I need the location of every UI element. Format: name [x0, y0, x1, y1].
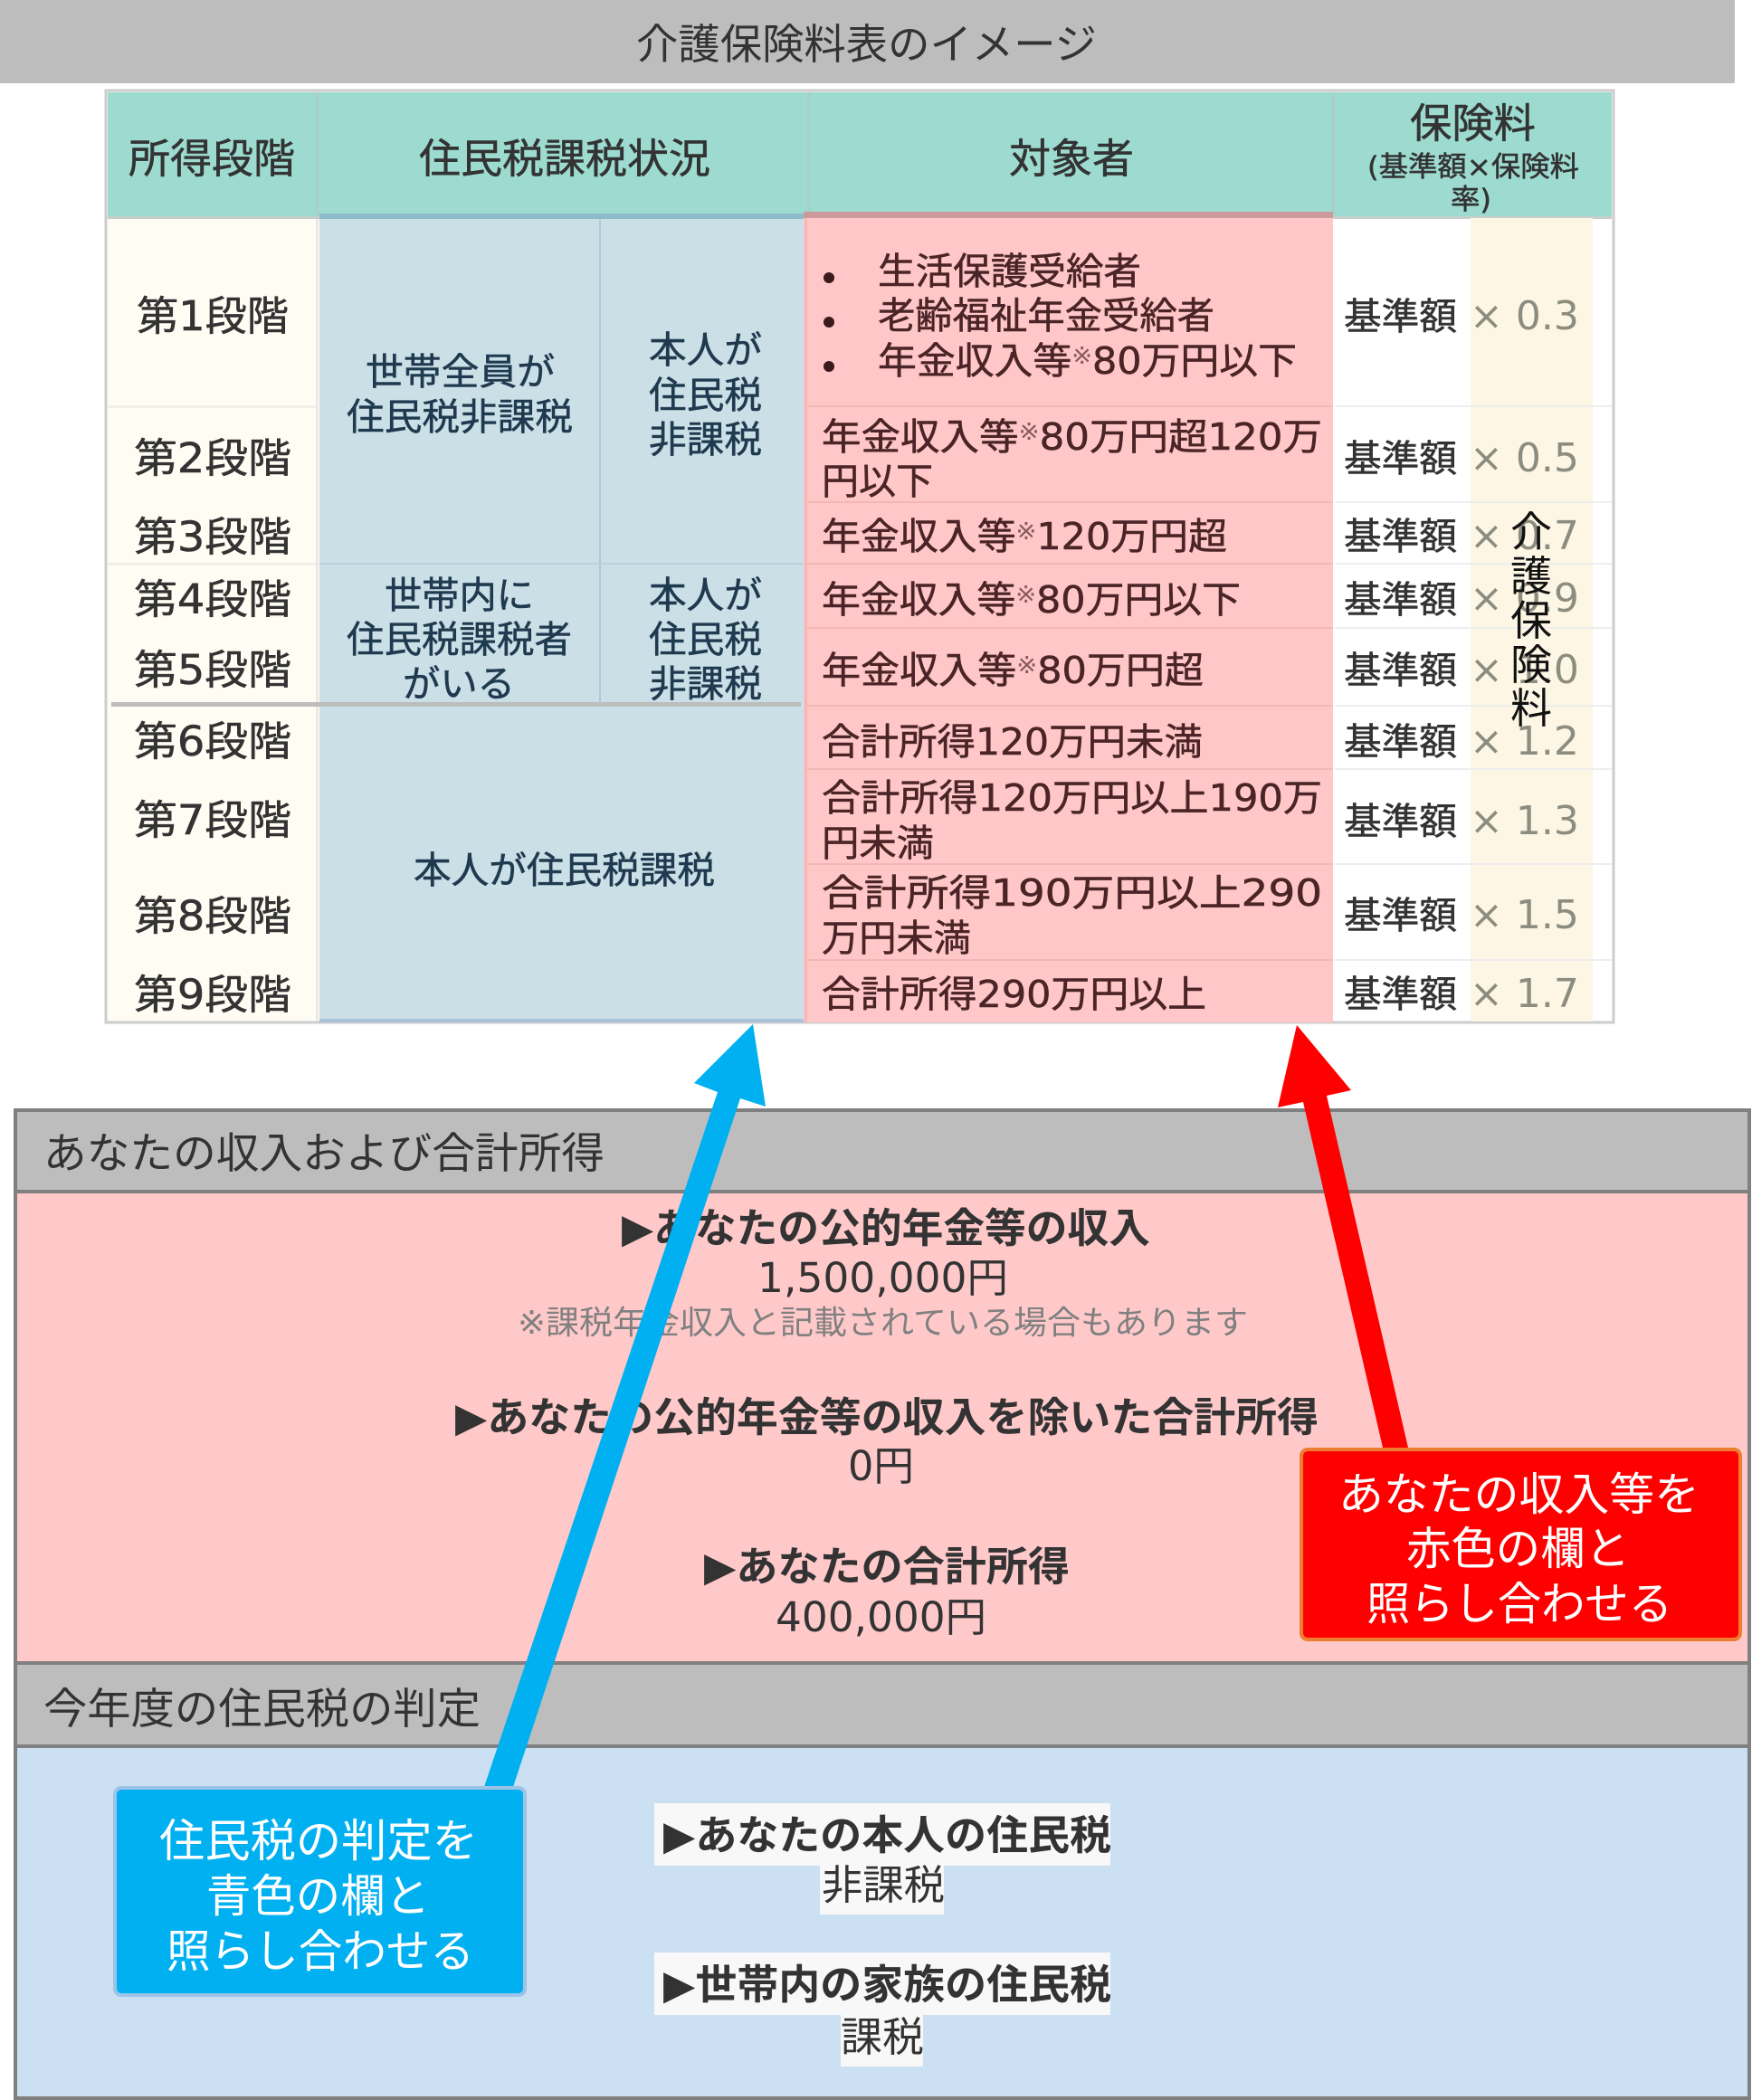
premium formula column: × 1.7 [1470, 971, 1579, 1017]
premium formula column: × 1.2 [1470, 718, 1579, 765]
premium formula column: 基準額 [1344, 720, 1457, 764]
income stage column: 第8段階 [134, 892, 291, 940]
income panel body: 1,500,000円 [757, 1254, 1008, 1302]
red target column: 年金収入等 [822, 415, 1007, 459]
income panel body: ▶あなたの公的年金等の収入 [622, 1204, 1150, 1252]
red target column: 120万円超 [1036, 515, 1227, 558]
premium formula column: × 0.5 [1470, 435, 1579, 481]
callout: compare income with red column [1301, 1449, 1740, 1639]
tax panel body [15, 1746, 1749, 2098]
panel: income and total earnings [15, 1110, 1749, 1663]
red target column: 合計所得120万円以上190万 [822, 776, 1322, 820]
vertical label: premium [1510, 508, 1552, 733]
panel: resident tax judgment [15, 1663, 1749, 2098]
arrow: blue pointing to tax status column [484, 1024, 766, 1787]
red target column: 年金収入等 [822, 515, 1007, 558]
title bar [0, 0, 1735, 83]
tax panel body: 非課税 [822, 1861, 945, 1909]
premium formula column: 基準額 [1344, 649, 1457, 692]
red target column: ※ [1015, 582, 1036, 609]
callout: compare income with red column: 照らし合わせる [1366, 1578, 1672, 1630]
premium formula column: 基準額 [1344, 515, 1457, 558]
income panel body: 400,000円 [776, 1593, 986, 1641]
red target column: 万円未満 [822, 917, 971, 960]
callout: compare tax judgment with blue column: 青色の欄と [206, 1870, 430, 1923]
premium formula column: × 1.0 [1470, 647, 1579, 693]
blue tax status column: 世帯内に [385, 574, 534, 617]
premium formula column: × 1.5 [1470, 892, 1579, 938]
blue tax status column: 住民税 [649, 618, 762, 661]
callout: compare tax judgment with blue column: 照らし合わせる [167, 1925, 474, 1978]
red target column: ※ [1016, 652, 1037, 679]
income stage column: 第2段階 [134, 434, 291, 482]
red target column: ※ [1016, 518, 1036, 546]
red target column: 合計所得190万円以上290 [822, 871, 1322, 915]
blue tax status column: 住民税課税者 [347, 618, 572, 661]
income stage column: 第1段階 [137, 292, 289, 340]
premium formula column: 基準額 [1344, 295, 1457, 338]
income stage column: 第5段階 [134, 646, 291, 694]
red target column: 老齢福祉年金受給者 [878, 294, 1214, 337]
callout: compare tax judgment with blue column [115, 1788, 525, 1995]
income panel body: ▶あなたの合計所得 [704, 1543, 1070, 1591]
income stage column: 第6段階 [134, 717, 291, 765]
blue tax status column [111, 214, 804, 1022]
vertical label: premium: 料 [1510, 684, 1552, 733]
premium formula column: 基準額 [1344, 800, 1457, 843]
red target column: 80万円以下 [1092, 339, 1297, 383]
red target column: 年金収入等 [822, 649, 1007, 692]
red target column: 合計所得120万円未満 [822, 720, 1203, 764]
red target column: 合計所得290万円以上 [822, 973, 1206, 1016]
vertical label: premium: 保 [1510, 596, 1552, 645]
red target column: 年金収入等 [822, 578, 1007, 622]
callout: compare income with red column: あなたの収入等を [1338, 1468, 1700, 1521]
red target column: 80万円以下 [1036, 578, 1241, 622]
premium formula column: × 0.7 [1470, 513, 1579, 559]
table header row: 対象者 [1009, 135, 1134, 183]
blue tax status column: 住民税 [649, 374, 762, 417]
income stage column: 第4段階 [134, 575, 291, 623]
tax panel header [15, 1663, 1749, 1746]
red target column: 80万円超120万 [1040, 415, 1322, 459]
premium formula column: × 0.9 [1470, 575, 1579, 622]
blue tax status column: 住民税非課税 [347, 395, 573, 439]
premium formula column: × 0.3 [1470, 293, 1579, 339]
red target column: 年金収入等 [878, 339, 1063, 383]
red target column: 円以下 [822, 460, 933, 503]
red target column [804, 212, 1333, 1022]
premium formula column: 基準額 [1344, 437, 1457, 480]
red target column: ※ [1071, 343, 1092, 370]
income panel body [15, 1192, 1749, 1663]
callout: compare tax judgment with blue column: 住民税の判定を [159, 1815, 478, 1867]
table header row: 率) [1451, 184, 1491, 216]
blue tax status column: 本人が [649, 328, 762, 372]
income stage column: 第7段階 [134, 796, 291, 844]
income stage column [108, 219, 319, 1021]
blue tax status column: 非課税 [649, 662, 762, 706]
red target column: 生活保護受給者 [878, 250, 1141, 293]
blue tax status column: 世帯全員が [366, 350, 555, 394]
blue tax status column: 本人が [649, 574, 762, 617]
red target column: ※ [1018, 419, 1040, 446]
title bar: 介護保険料表のイメージ [636, 20, 1097, 69]
red target column: 80万円超 [1037, 649, 1204, 692]
table header row: (基準額×保険料 [1367, 151, 1579, 184]
income panel header: あなたの収入および合計所得 [43, 1129, 605, 1179]
tax panel header: 今年度の住民税の判定 [43, 1685, 481, 1734]
premium formula column: 基準額 [1344, 973, 1457, 1016]
income stage column: 第9段階 [134, 971, 291, 1019]
tax panel body: ▶あなたの本人の住民税 [663, 1811, 1111, 1859]
vertical label: premium: 介 [1510, 508, 1552, 556]
premium formula column: 基準額 [1344, 894, 1457, 937]
arrow: red pointing to target column [1278, 1025, 1408, 1448]
income panel body: ▶あなたの公的年金等の収入を除いた合計所得 [455, 1393, 1319, 1441]
red target column: 円未満 [822, 822, 934, 865]
blue tax status column: 非課税 [649, 418, 762, 461]
tax panel body: ▶世帯内の家族の住民税 [663, 1961, 1111, 2009]
blue tax status column: がいる [403, 662, 515, 706]
table header row: 住民税課税状況 [419, 135, 710, 183]
table header row: 保険料 [1410, 100, 1536, 147]
callout: compare income with red column: 赤色の欄と [1406, 1523, 1630, 1575]
vertical label: premium: 護 [1510, 552, 1552, 601]
vertical label: premium: 険 [1510, 641, 1552, 689]
income panel body: ※課税年金収入と記載されている場合もあります [518, 1305, 1248, 1342]
income stage column: 第3段階 [134, 513, 291, 561]
premium formula column [1335, 218, 1612, 1021]
table header row: 所得段階 [129, 135, 295, 183]
tax panel body: 課税 [841, 2013, 924, 2061]
panel: premium table [106, 90, 1614, 1022]
blue tax status column: 本人が住民税課税 [414, 849, 715, 892]
table header row [108, 92, 1612, 219]
income panel header [15, 1110, 1749, 1192]
premium formula column: × 1.3 [1470, 798, 1579, 844]
premium formula column: 基準額 [1344, 578, 1457, 622]
income panel body: 0円 [848, 1442, 914, 1490]
